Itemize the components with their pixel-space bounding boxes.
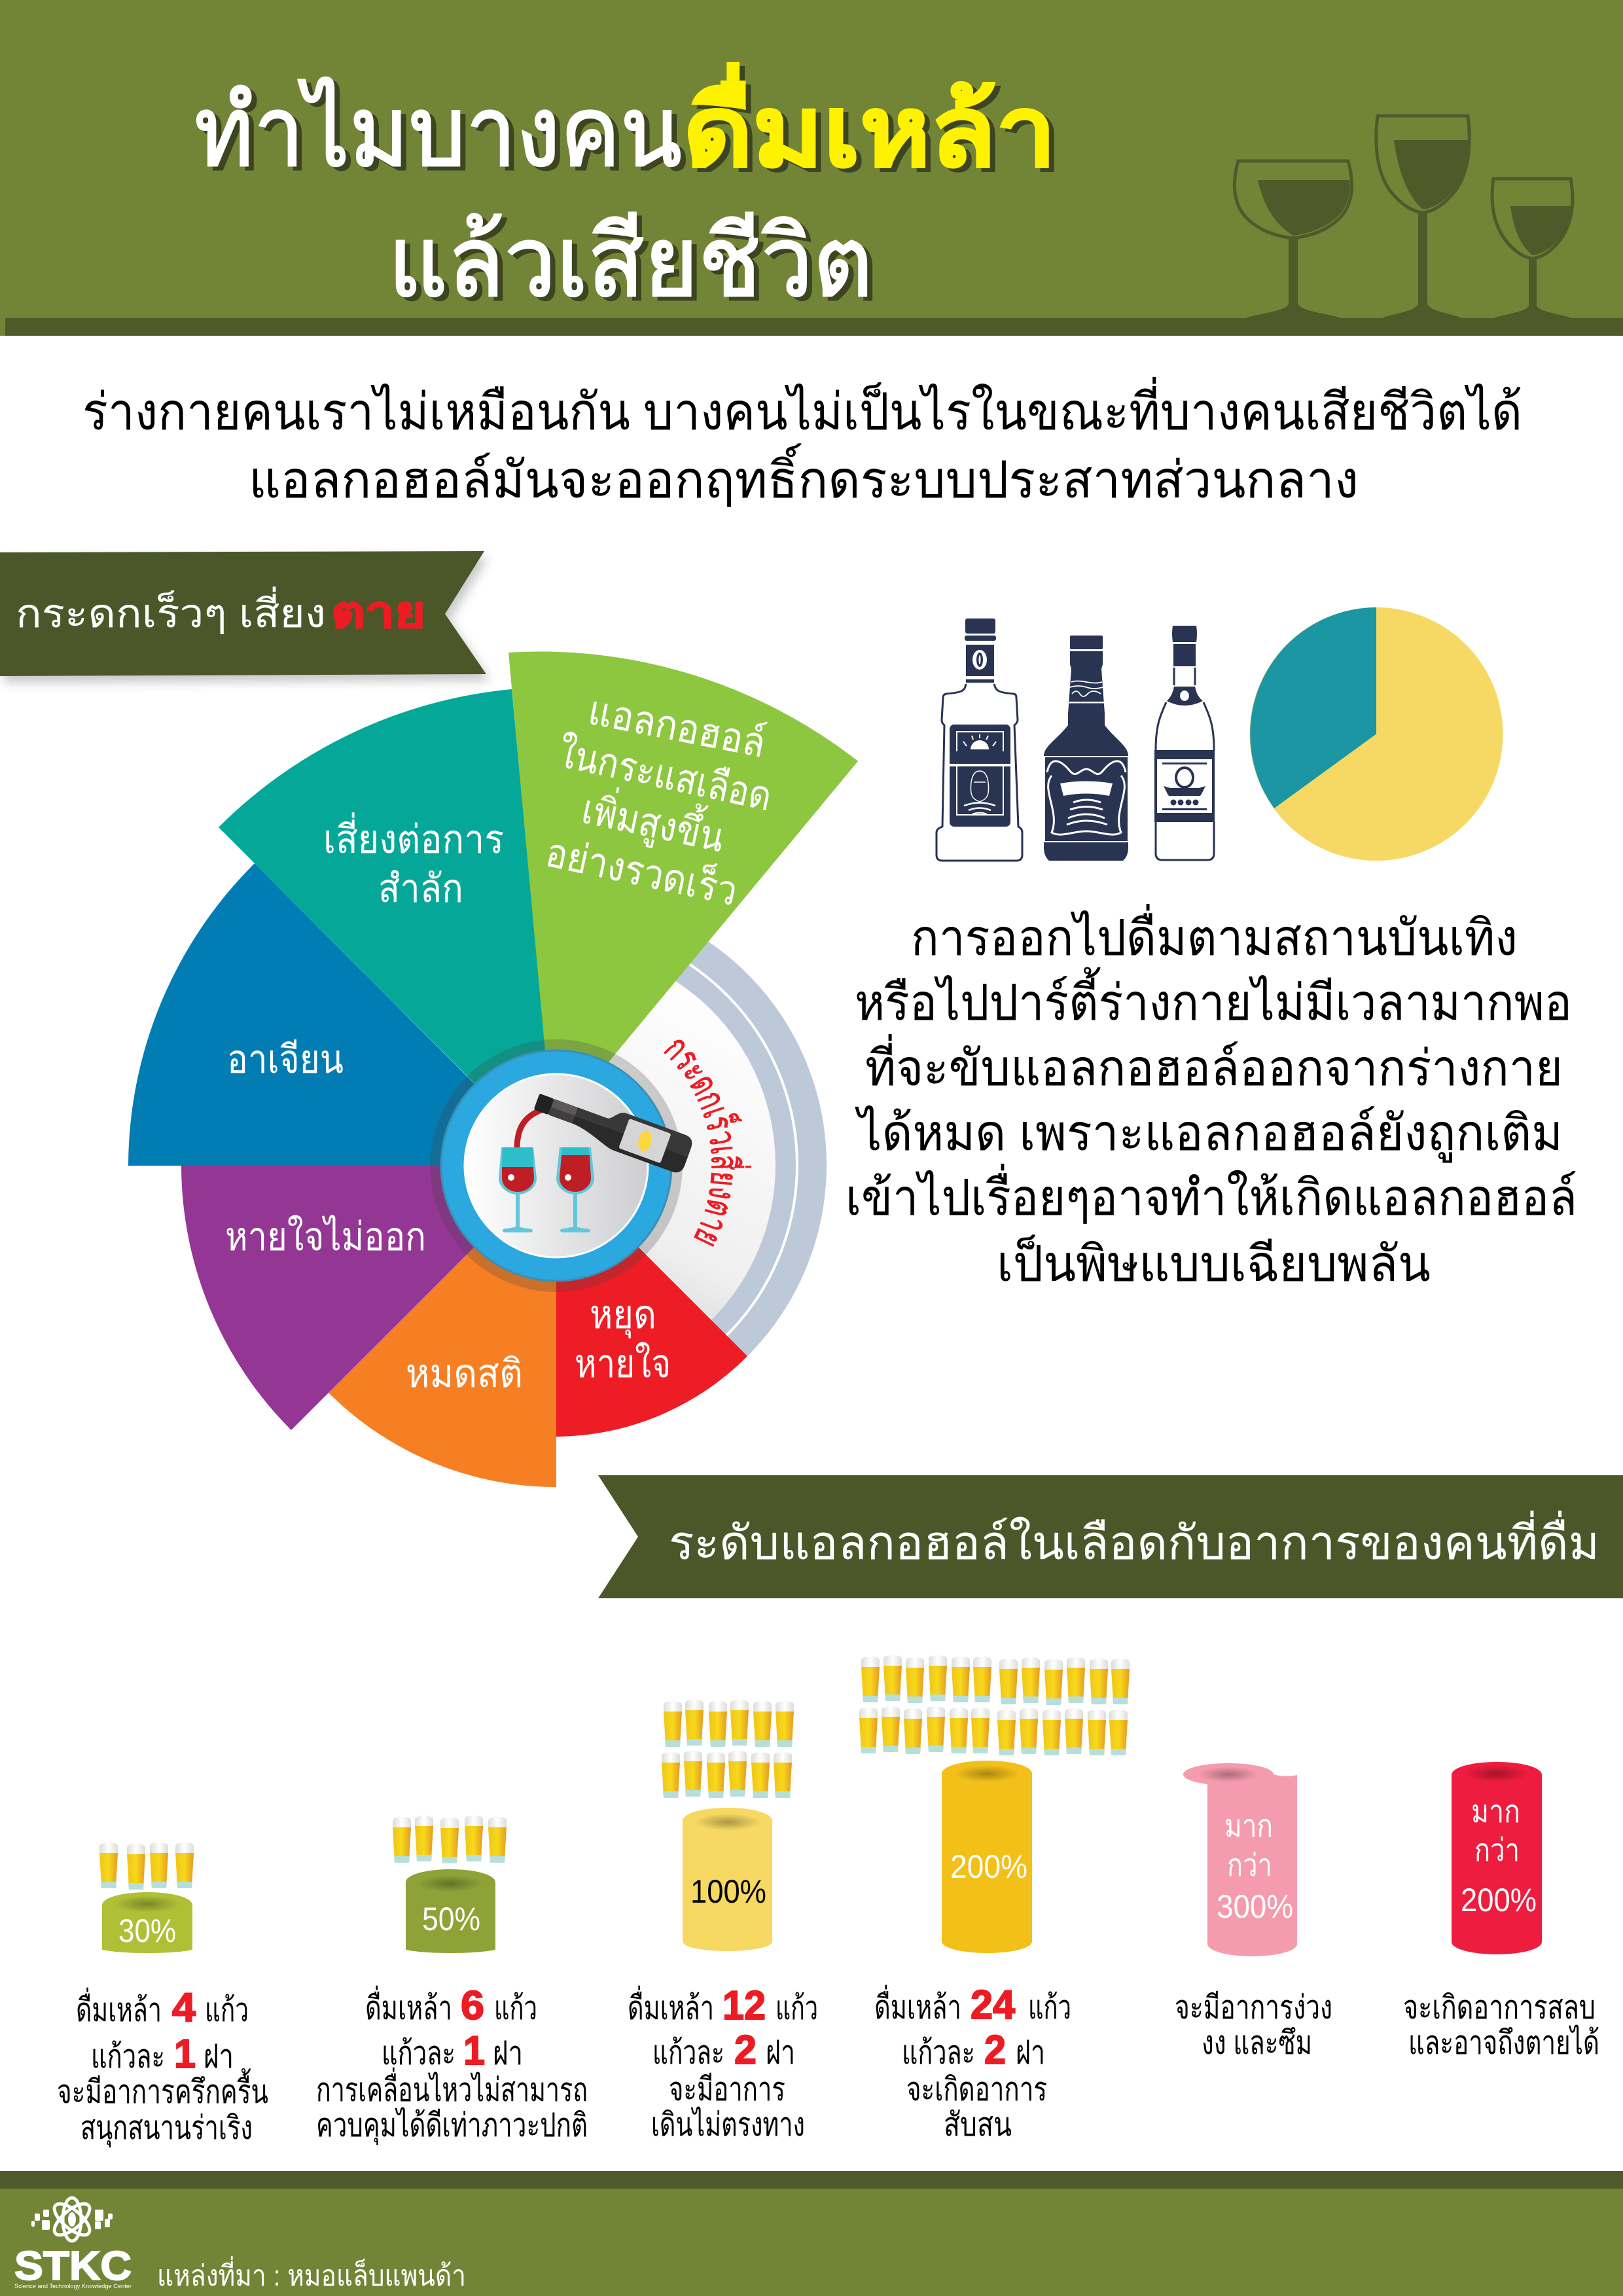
cylinder more than 300% [1183, 1763, 1297, 1956]
cylinder more than 200%: กว่า [1474, 1833, 1520, 1868]
caption 30%: แก้วละ [91, 2038, 165, 2075]
slice: unconscious [329, 1165, 556, 1487]
icon: wine glasses [1234, 116, 1573, 318]
caption 100%: 12 [722, 1983, 766, 2028]
ribbon: heading chug risk: กระดกเร็วๆ เสี่ยง [16, 586, 326, 636]
icon: beer glasses 12 [662, 1700, 794, 1798]
slice: blood alcohol rises: ในกระแสเลือด [554, 730, 776, 820]
title: แล้วเสียชีวิต [388, 207, 873, 317]
cylinder 200%: 200% [950, 1848, 1027, 1885]
slice: unconscious: หมดสติ [406, 1352, 523, 1395]
icon: bottle two [1044, 636, 1128, 861]
ribbon: heading blood alcohol levels: ระดับแอลกอฮอล์ในเลือดกับอาการของคนที่ดื่ม [669, 1511, 1599, 1570]
caption 30%: ฝา [204, 2038, 234, 2075]
caption more than 200% [1403, 1989, 1599, 2061]
slice: stop breathing: หายใจ [575, 1342, 671, 1386]
slice: choking risk [219, 689, 556, 1165]
slice: choking risk: เสี่ยงต่อการ [323, 812, 504, 861]
body paragraph: เข้าไปเรื่อยๆอาจทำให้เกิดแอลกอฮอล์ [846, 1164, 1577, 1226]
cylinder 30% [102, 1892, 192, 1953]
caption 30%: จะมีอาการครึกครื้น [57, 2068, 268, 2110]
caption 300%: งง และซึม [1202, 2024, 1312, 2061]
caption 200%: 2 [984, 2028, 1006, 2073]
intro text: ร่างกายคนเราไม่เหมือนกัน บางคนไม่เป็นไรในขณะที่บางคนเสียชีวิตได้ [82, 377, 1522, 440]
cylinder 50%: 50% [422, 1901, 480, 1937]
source credit: แหล่งที่มา : หมอแล็บแพนด้า [157, 2255, 466, 2292]
caption 50%: ควบคุมได้ดีเท่าภาวะปกติ [316, 2107, 588, 2145]
slice: blood alcohol rises: อย่างรวดเร็ว [542, 828, 742, 914]
title [194, 63, 1056, 317]
icon: beer glasses 24 [859, 1655, 1130, 1755]
caption 100%: 2 [734, 2028, 757, 2073]
icon: STKC emblem [31, 2198, 113, 2241]
cylinder 50% [406, 1869, 495, 1953]
cylinder 100% [683, 1808, 772, 1951]
body paragraph: เป็นพิษแบบเฉียบพลัน [997, 1234, 1431, 1292]
caption 200%: ฝา [1016, 2034, 1045, 2071]
icon: wine bottle [530, 1083, 694, 1175]
cylinder 30%: 30% [118, 1912, 176, 1949]
title: ดื่มเหล้า [683, 63, 1056, 187]
caption 100%: ดื่มเหล้า [628, 1986, 714, 2026]
caption 200%: แก้ว [1028, 1989, 1071, 2026]
slice: stop breathing: หยุด [590, 1293, 656, 1338]
logo wordmark: STKC [14, 2244, 132, 2289]
cylinder more than 300%: 300% [1217, 1888, 1293, 1925]
caption 200%: 24 [971, 1982, 1016, 2028]
body paragraph [846, 904, 1577, 1292]
icon: wine glass right [556, 1147, 594, 1232]
caption 100%: จะมีอาการ [669, 2071, 785, 2108]
body paragraph: ที่จะขับแอลกอฮอล์ออกจากร่างกาย [865, 1034, 1563, 1096]
caption 100%: ฝา [766, 2034, 795, 2071]
caption 50%: แก้วละ [382, 2035, 455, 2072]
body paragraph: ได้หมด เพราะแอลกอฮอล์ยังถูกเติม [854, 1105, 1563, 1163]
slice: cannot breathe: หายใจไม่ออก [225, 1214, 426, 1259]
caption 30%: ดื่มเหล้า [76, 1988, 162, 2028]
caption 50%: ฝา [493, 2035, 523, 2072]
ribbon: heading blood alcohol levels [598, 1475, 1623, 1598]
ribbon: heading chug risk [0, 551, 486, 676]
caption 100% [628, 1983, 818, 2143]
caption 200% [874, 1982, 1071, 2143]
icon: wine glass left [499, 1147, 537, 1232]
caption 50%: แก้ว [494, 1990, 537, 2026]
caption 300% [1175, 1989, 1332, 2061]
caption 100%: แก้ว [776, 1990, 818, 2026]
caption 50%: การเคลื่อนไหวไม่สามารถ [316, 2068, 588, 2108]
icon: wine stream [517, 1109, 543, 1149]
slice: vomiting [128, 863, 556, 1166]
curved label: กระดกเร็วเสี่ยงตาย [664, 1039, 751, 1247]
slice: stop breathing [556, 1165, 747, 1437]
caption 100%: แก้วละ [652, 2034, 724, 2071]
body paragraph: การออกไปดื่มตามสถานบันเทิง [911, 904, 1518, 966]
cylinder more than 300%: มาก [1224, 1809, 1273, 1844]
caption 30% [57, 1985, 268, 2147]
caption 50% [316, 1983, 588, 2145]
slice: vomiting: อาเจียน [227, 1037, 344, 1081]
hub [430, 1039, 694, 1292]
caption 100%: เดินไม่ตรงทาง [651, 2106, 805, 2143]
slice: blood alcohol rises [508, 652, 858, 1165]
body paragraph: หรือไปปาร์ตี้ร่างกายไม่มีเวลามากพอ [855, 967, 1572, 1031]
cylinder 200% [942, 1761, 1032, 1953]
header band [0, 0, 1623, 336]
caption 200%: สับสน [944, 2106, 1012, 2143]
ribbon: heading chug risk: ตาย [331, 588, 425, 636]
caption 30%: แก้ว [205, 1992, 249, 2028]
intro text [82, 377, 1522, 509]
caption 300%: จะมีอาการง่วง [1175, 1989, 1332, 2026]
caption 50%: 1 [463, 2028, 485, 2073]
caption 50%: ดื่มเหล้า [365, 1986, 452, 2026]
caption 200%: จะเกิดอาการ [906, 2071, 1047, 2108]
caption 50%: 6 [461, 1983, 484, 2028]
caption 200%: แก้วละ [902, 2034, 975, 2071]
wheel chart [128, 652, 858, 1487]
icon: beer glasses 6 [393, 1816, 507, 1863]
outer rings [286, 895, 827, 1435]
title: ทำไมบางคน [194, 77, 682, 187]
caption 30%: 1 [174, 2032, 196, 2077]
icon: beer glasses 4 [99, 1842, 194, 1890]
icon: bottle three [1154, 626, 1215, 860]
slice: blood alcohol rises: เพิ่มสูงขึ้น [578, 780, 730, 862]
caption 30%: สนุกสนานร่าเริง [80, 2109, 253, 2147]
caption 200%: ดื่มเหล้า [874, 1985, 961, 2026]
cylinder more than 200%: มาก [1471, 1795, 1520, 1829]
slice: blood alcohol rises: แอลกอฮอล์ [584, 688, 769, 766]
cylinder more than 300%: กว่า [1227, 1848, 1272, 1883]
pie chart [1250, 607, 1503, 861]
cylinder more than 200%: 200% [1461, 1882, 1537, 1918]
slice: cannot breathe [181, 1165, 556, 1430]
slice: choking risk: สำลัก [378, 867, 463, 910]
cylinder 100%: 100% [690, 1873, 766, 1910]
cylinder more than 200% [1452, 1762, 1542, 1954]
footer band [0, 2171, 1623, 2296]
intro text: แอลกอฮอล์มันจะออกฤทธิ์กดระบบประสาทส่วนกลาง [249, 443, 1359, 509]
logo wordmark: Science and Technology Knowledge Center [14, 2283, 132, 2289]
icon: bottle one [936, 619, 1022, 861]
caption 30%: 4 [172, 1985, 196, 2030]
